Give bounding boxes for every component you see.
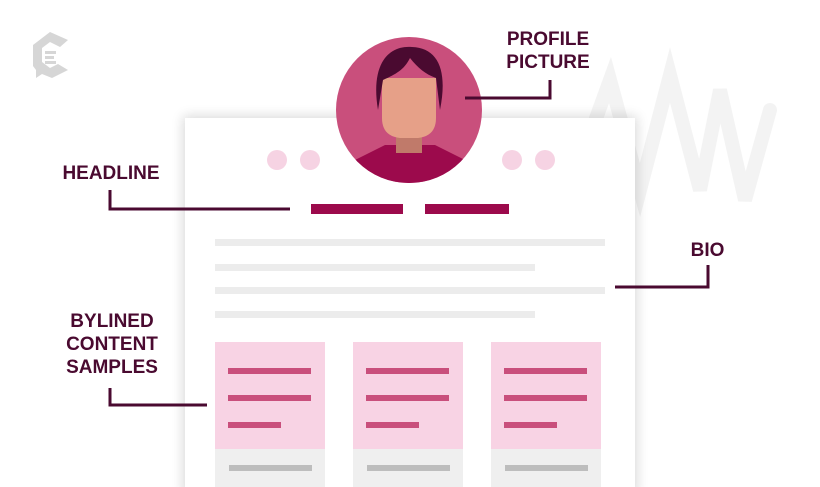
decorative scribble xyxy=(570,75,770,200)
label: bylined content samples: SAMPLES xyxy=(66,357,158,378)
profile picture xyxy=(336,37,482,183)
card xyxy=(185,118,635,487)
label: headline: HEADLINE xyxy=(62,163,160,184)
label: profile picture: PROFILE xyxy=(507,29,589,50)
label: bylined content samples: CONTENT xyxy=(66,334,158,355)
card shadow xyxy=(183,116,637,487)
label: profile picture: PICTURE xyxy=(506,52,590,73)
label: bylined content samples: BYLINED xyxy=(70,311,154,332)
headline bars xyxy=(311,204,509,214)
connectors xyxy=(110,80,708,405)
logo xyxy=(33,32,68,78)
bio lines xyxy=(215,239,605,318)
label: bylined content samples xyxy=(66,311,158,378)
label: bio: BIO xyxy=(691,240,724,261)
content samples xyxy=(215,342,601,487)
label: profile picture xyxy=(506,29,590,73)
